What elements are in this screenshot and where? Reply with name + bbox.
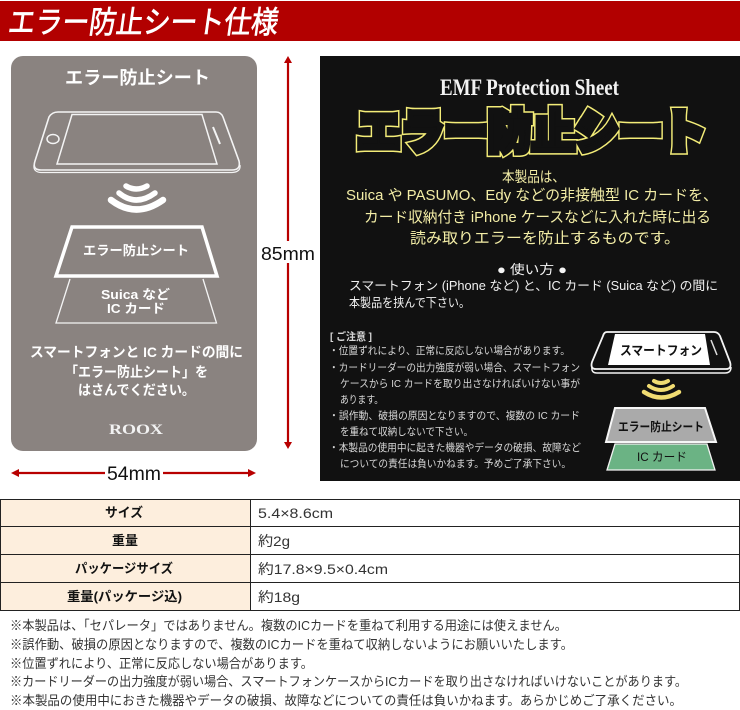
IC card layer	[607, 444, 715, 470]
description text: 読み取りエラーを防止するものです。	[410, 230, 680, 247]
row: package size: 約17.8×9.5×0.4cm	[258, 561, 388, 577]
usage text: スマートフォン (iPhone など) と、IC カード (Suica など) の間に	[349, 279, 718, 293]
IC card diagram: IC カード	[107, 301, 165, 316]
description text	[346, 169, 718, 247]
footnotes: ※カードリーダーの出力強度が弱い場合、スマートフォンケースからICカードを取り出さなければいけないことがあります。	[10, 674, 687, 689]
spec table	[0, 500, 740, 610]
footnotes	[10, 618, 687, 708]
caution notes: [ ご注意 ]	[330, 330, 372, 343]
english heading: EMF Protection Sheet	[440, 75, 619, 100]
usage text	[349, 279, 718, 310]
row: size	[105, 505, 333, 521]
row: weight with package: 約18g	[258, 589, 300, 605]
usage heading: ● 使い方 ●	[497, 262, 567, 277]
icon: small phone	[592, 332, 731, 373]
header banner	[0, 1, 740, 41]
footnotes: ※本製品は、「セパレータ」ではありません。複数のICカードを重ねて利用する用途には使えません。	[10, 618, 567, 633]
caution notes: についての責任は負いかねます。予めご了承下さい。	[340, 457, 571, 470]
row: weight	[112, 533, 290, 549]
row: package size: パッケージサイズ	[75, 561, 173, 576]
IC card diagram: Suica など	[101, 287, 170, 302]
description text: カード収納付き iPhone ケースなどに入れた時に出る	[364, 209, 711, 226]
icon: small phone: スマートフォン	[620, 343, 702, 358]
IC card layer: IC カード	[637, 450, 687, 464]
panel: grey sheet card	[11, 56, 257, 451]
card instruction text	[30, 344, 243, 398]
row: weight with package	[67, 589, 300, 605]
arrow: height 85mm: 85mm	[261, 244, 315, 264]
footnotes: ※誤作動、破損の原因となりますので、複数のICカードを重ねて収納しないようにお願いいたします。	[10, 637, 573, 652]
arrow: height 85mm	[261, 56, 315, 449]
card heading: エラー防止シート	[65, 68, 210, 88]
icon: yellow signal waves	[644, 381, 679, 398]
row: weight: 重量	[112, 533, 138, 548]
caution notes: ・誤作動、破損の原因となりますので、複数の IC カード	[329, 409, 580, 422]
outlined large title: エラー防止シート	[357, 106, 706, 158]
title: エラー防止シート仕様	[6, 5, 281, 40]
arrow: width 54mm	[11, 464, 256, 485]
footnotes: ※位置ずれにより、正常に反応しない場合があります。	[10, 656, 313, 671]
brand logo: ROOX	[109, 422, 163, 438]
caution notes: あります。	[340, 394, 383, 406]
icon: signal waves	[111, 186, 163, 210]
footnotes: ※本製品の使用中におきた機器やデータの破損、故障などについての責任は負いかねます。あらかじめご了承ください。	[10, 693, 682, 708]
caution notes: ・本製品の使用中に起きた機器やデータの破損、故障など	[329, 441, 581, 454]
row: size: 5.4×8.6cm	[258, 505, 333, 521]
caution notes: ・位置ずれにより、正常に反応しない場合があります。	[329, 344, 570, 357]
panel: black package card	[320, 56, 740, 481]
row: size: サイズ	[105, 505, 143, 520]
description text: Suica や PASUMO、Edy などの非接触型 IC カードを、	[346, 187, 718, 204]
description text: 本製品は、	[502, 169, 565, 186]
sheet diagram: エラー防止シート	[83, 243, 189, 258]
row: package size	[75, 561, 388, 577]
card instruction text: 「エラー防止シート」を	[65, 364, 208, 380]
icon: phone outline	[34, 112, 240, 172]
sheet layer: エラー防止シート	[618, 419, 704, 434]
sheet diagram	[56, 227, 217, 276]
outlined large title: エラー防止シート	[357, 106, 706, 158]
caution notes: ・カードリーダーの出力強度が弱い場合、スマートフォン	[329, 361, 580, 374]
caution notes	[329, 330, 581, 470]
card instruction text: スマートフォンと IC カードの間に	[30, 344, 243, 360]
caution notes: ケースから IC カードを取り出さなければいけない事が	[340, 377, 580, 390]
arrow: width 54mm: 54mm	[107, 464, 161, 485]
IC card diagram	[56, 279, 216, 323]
card instruction text: はさんでください。	[78, 382, 195, 398]
row: weight: 約2g	[258, 533, 290, 549]
usage text: 本製品を挟んで下さい。	[349, 296, 470, 310]
caution notes: を重ねて収納しないで下さい。	[340, 425, 473, 438]
sheet layer	[606, 408, 716, 442]
row: weight with package: 重量(パッケージ込)	[67, 589, 182, 604]
